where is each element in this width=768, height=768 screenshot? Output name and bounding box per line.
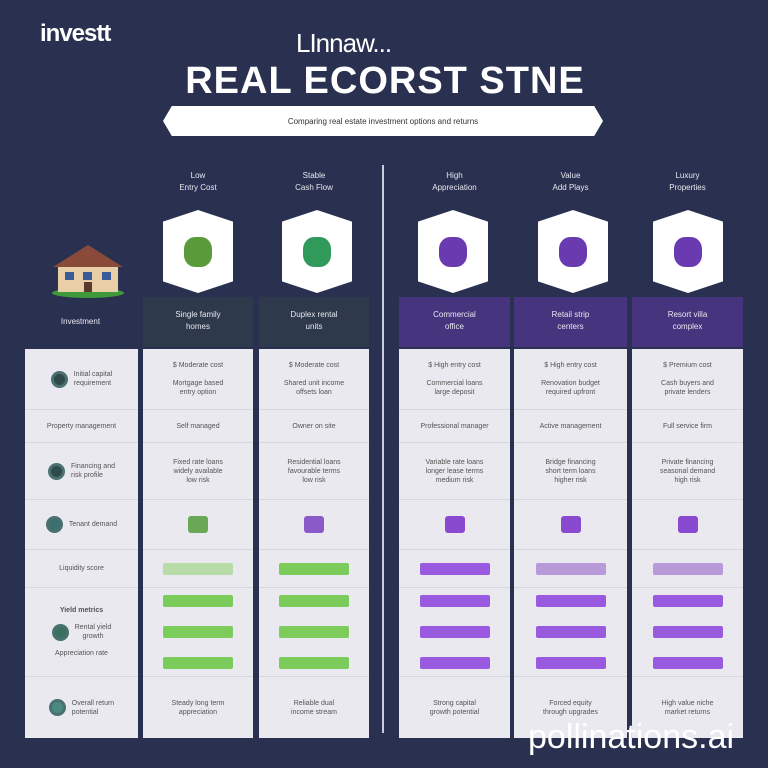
data column 1: Self managed	[176, 422, 220, 430]
column headers: Low	[191, 171, 205, 180]
label column: Property management	[47, 422, 116, 430]
data column 2: Reliable dual	[294, 700, 334, 706]
data column 2: $ Moderate cost	[289, 362, 339, 369]
label column: Appreciation rate	[55, 650, 108, 657]
text: units	[306, 322, 322, 331]
text: Value	[561, 171, 580, 180]
text: Properties	[669, 183, 706, 192]
data column 5: private lenders	[665, 389, 710, 396]
text: Appreciation	[432, 183, 477, 192]
data column 2: income stream	[291, 708, 337, 716]
label column: Tenant demand	[69, 521, 117, 528]
data column 4: short term loans	[545, 468, 596, 474]
data column 3: Professional manager	[420, 422, 489, 430]
data column 2: offsets loan	[296, 389, 332, 396]
data column 4: required upfront	[546, 389, 595, 396]
header bands: homes	[186, 322, 210, 331]
data column 5: Full service firm	[663, 422, 712, 430]
data column 5: Private financing	[662, 458, 713, 466]
data column 5	[632, 349, 743, 738]
label column: Initial capital	[74, 371, 112, 378]
data column 3: Commercial loans	[426, 380, 483, 387]
label column: Yield metrics	[60, 607, 103, 614]
label column: Liquidity score	[59, 565, 104, 572]
data column 1: low risk	[186, 476, 210, 484]
data column 1: Steady long term	[172, 700, 224, 706]
column headers	[179, 171, 217, 192]
data column 1: widely available	[173, 468, 223, 474]
data column 4: through upgrades	[543, 708, 598, 716]
data column 1: $ Moderate cost	[173, 362, 223, 369]
data column 1: appreciation	[179, 708, 217, 716]
data column 5: high risk	[674, 476, 701, 484]
label column: Overall return	[72, 700, 114, 706]
data column 4: Renovation budget	[541, 380, 600, 387]
text: Add Plays	[552, 183, 589, 192]
text: Commercial	[433, 310, 476, 319]
text: office	[445, 322, 464, 331]
data column 2: favourable terms	[288, 468, 340, 474]
label column: risk profile	[71, 472, 103, 479]
data column 4: Forced equity	[549, 700, 592, 706]
data column 5: seasonal demand	[660, 468, 715, 474]
header bands	[143, 297, 253, 347]
label column: growth	[82, 633, 104, 640]
label column: requirement	[74, 380, 111, 387]
data column 3: large deposit	[434, 389, 475, 396]
data column 2: Owner on site	[292, 422, 336, 430]
column headers: Entry Cost	[179, 183, 217, 192]
data column 1: Fixed rate loans	[173, 458, 223, 466]
text: Resort villa	[668, 310, 707, 319]
data column 5: $ Premium cost	[663, 362, 712, 369]
data column 4	[514, 349, 627, 738]
watermark: pollinations.ai	[528, 718, 734, 756]
data column 4: Active management	[540, 422, 601, 430]
text: Duplex rental	[290, 310, 338, 319]
banner: Comparing real estate investment options and returns	[288, 116, 478, 126]
label column: Financing and	[71, 463, 115, 470]
data column 3: medium risk	[436, 476, 473, 484]
data column 4: $ High entry cost	[544, 362, 597, 369]
label column	[25, 349, 138, 738]
text: centers	[557, 322, 584, 331]
label column: Rental yield	[75, 624, 111, 631]
data column 2: Shared unit income	[284, 380, 344, 387]
text: Retail strip	[552, 310, 589, 319]
subtitle heading: LInnaw...	[296, 28, 391, 58]
data column 2	[259, 349, 369, 738]
data column 5: market returns	[665, 708, 710, 716]
header bands: Single family	[175, 310, 221, 319]
banner	[163, 106, 603, 136]
logo: investt	[40, 20, 110, 47]
label header: Investment	[61, 317, 100, 326]
data column 3	[399, 349, 510, 738]
data column 1	[143, 349, 253, 738]
data column 1: entry option	[180, 389, 216, 396]
data column 3: longer lease terms	[426, 468, 483, 474]
text: High	[446, 171, 463, 180]
label column: potential	[72, 708, 98, 716]
data column 3: Variable rate loans	[426, 458, 483, 466]
data column 3: $ High entry cost	[428, 362, 481, 369]
divider arrow	[382, 165, 384, 733]
data column 1: Mortgage based	[173, 380, 223, 387]
house icon	[52, 245, 124, 298]
data column 3: Strong capital	[433, 700, 476, 706]
data column 3: growth potential	[430, 708, 479, 716]
text: Stable	[303, 171, 325, 180]
data column 4: higher risk	[554, 476, 587, 484]
data column 2: Residential loans	[287, 458, 341, 466]
data column 2: low risk	[302, 476, 326, 484]
text: Cash Flow	[295, 183, 333, 192]
data column 5: Cash buyers and	[661, 380, 714, 387]
cards	[163, 210, 233, 293]
title: REAL ECORST STNE	[185, 60, 585, 102]
data column 5: High value niche	[662, 700, 713, 706]
data column 4: Bridge financing	[545, 458, 596, 466]
text: Luxury	[675, 171, 700, 180]
text: complex	[673, 322, 702, 331]
